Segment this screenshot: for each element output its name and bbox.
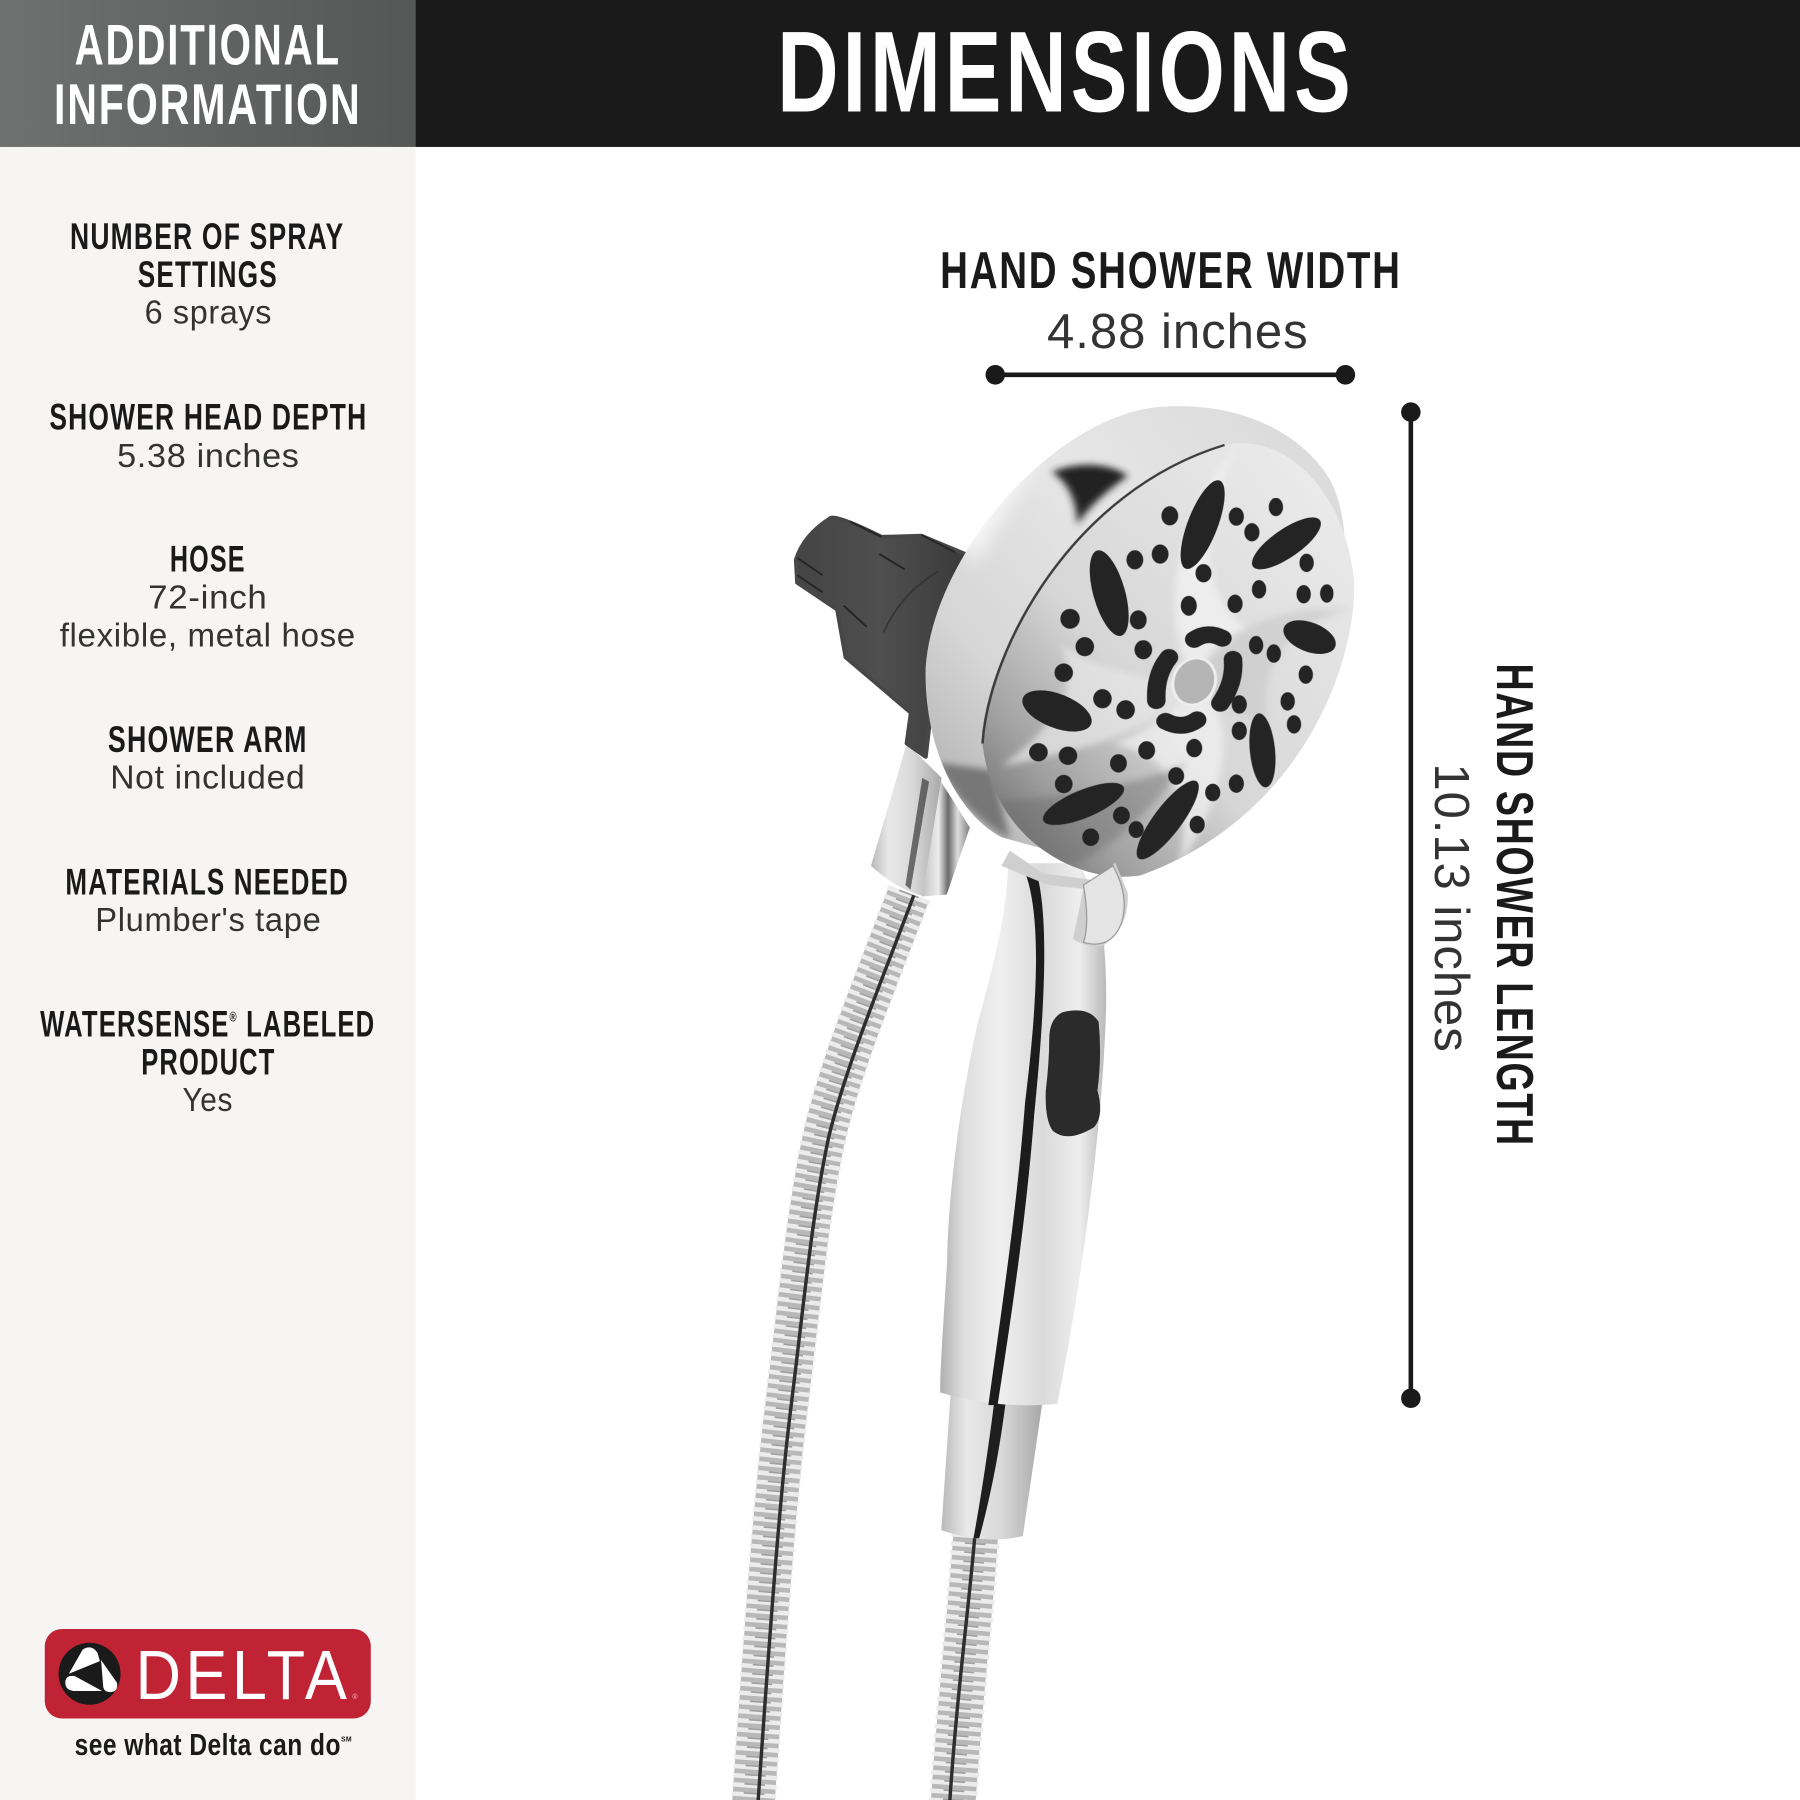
spray nozzles: small dots [1029, 498, 1334, 846]
Delta logo: DELTA [135, 1636, 351, 1714]
spec: shower arm [108, 719, 308, 797]
title bar: dimensions [416, 0, 1800, 147]
spec: watersense labeled product [40, 1004, 375, 1119]
Delta logo: ® [352, 1693, 358, 1701]
tagline: see what Delta can do [75, 1727, 341, 1762]
spec: materials needed [65, 861, 349, 939]
shower arm tube [871, 743, 970, 897]
spec: number of spray settings [70, 216, 344, 332]
width dimension line [986, 365, 1355, 385]
length dimension line [1401, 402, 1421, 1408]
spec: shower arm: Not included [110, 760, 305, 797]
spec: materials needed: Plumber's tape [95, 902, 321, 939]
sidebar header: INFORMATION [54, 73, 362, 137]
icon: Delta emblem [59, 1643, 121, 1705]
hose: long left [753, 893, 914, 1800]
Delta logo [45, 1629, 371, 1762]
spec: watersense labeled product: WATERSENSE [40, 1004, 311, 1045]
spec: materials needed: MATERIALS NEEDED [65, 861, 349, 902]
callout: hand shower width [940, 241, 1402, 385]
spec: shower arm: SHOWER ARM [108, 719, 308, 760]
spec: number of spray settings: 6 sprays [145, 295, 272, 332]
shower head, drawn in local coordinates [796, 406, 1354, 946]
callout: hand shower length [1401, 402, 1544, 1408]
head shell [926, 406, 1345, 875]
spec: number of spray settings: NUMBER OF SPRAY [70, 216, 344, 257]
spec: hose: 72-inch [148, 579, 267, 616]
icon: spray button [1046, 1010, 1100, 1136]
spec: watersense labeled product: ® [230, 1010, 238, 1025]
title bar: dimensions: DIMENSIONS [777, 8, 1355, 136]
Delta logo: SM [341, 1736, 352, 1743]
spec: shower head depth: SHOWER HEAD DEPTH [49, 396, 367, 437]
callout: hand shower length: HAND SHOWER LENGTH [1486, 664, 1544, 1147]
hose: short right [949, 1534, 976, 1800]
callout: hand shower width: 4.88 inches [1047, 304, 1309, 359]
handle body [940, 863, 1106, 1405]
spec: shower head depth: 5.38 inches [117, 438, 300, 475]
handle collar [941, 1395, 1042, 1539]
spec: hose: HOSE [170, 539, 246, 580]
spec: watersense labeled product: PRODUCT [141, 1041, 276, 1082]
head face [982, 443, 1354, 877]
spec: hose [60, 539, 356, 654]
swirl blades [1003, 478, 1338, 864]
spec: hose: flexible, metal hose [60, 617, 356, 654]
slider clip [1001, 851, 1128, 946]
spray nozzles: center arcs [1156, 635, 1233, 725]
spec: number of spray settings: SETTINGS [138, 254, 278, 295]
face rim [982, 445, 1225, 743]
sidebar header: ADDITIONAL [75, 13, 341, 77]
spec: shower head depth [49, 396, 367, 475]
callout: hand shower width: HAND SHOWER WIDTH [940, 241, 1402, 299]
spray nozzles: petals [1016, 476, 1341, 866]
illustration: hand shower [753, 406, 1354, 1800]
spec: watersense labeled product: LABELED [238, 1004, 375, 1045]
spec: watersense labeled product: Yes [183, 1082, 233, 1119]
panel: additional information sidebar [0, 0, 416, 1800]
callout: hand shower length: 10.13 inches [1424, 763, 1479, 1053]
sidebar header [0, 0, 416, 147]
center cap [1167, 654, 1221, 709]
mount: dark swivel connector [796, 518, 966, 757]
